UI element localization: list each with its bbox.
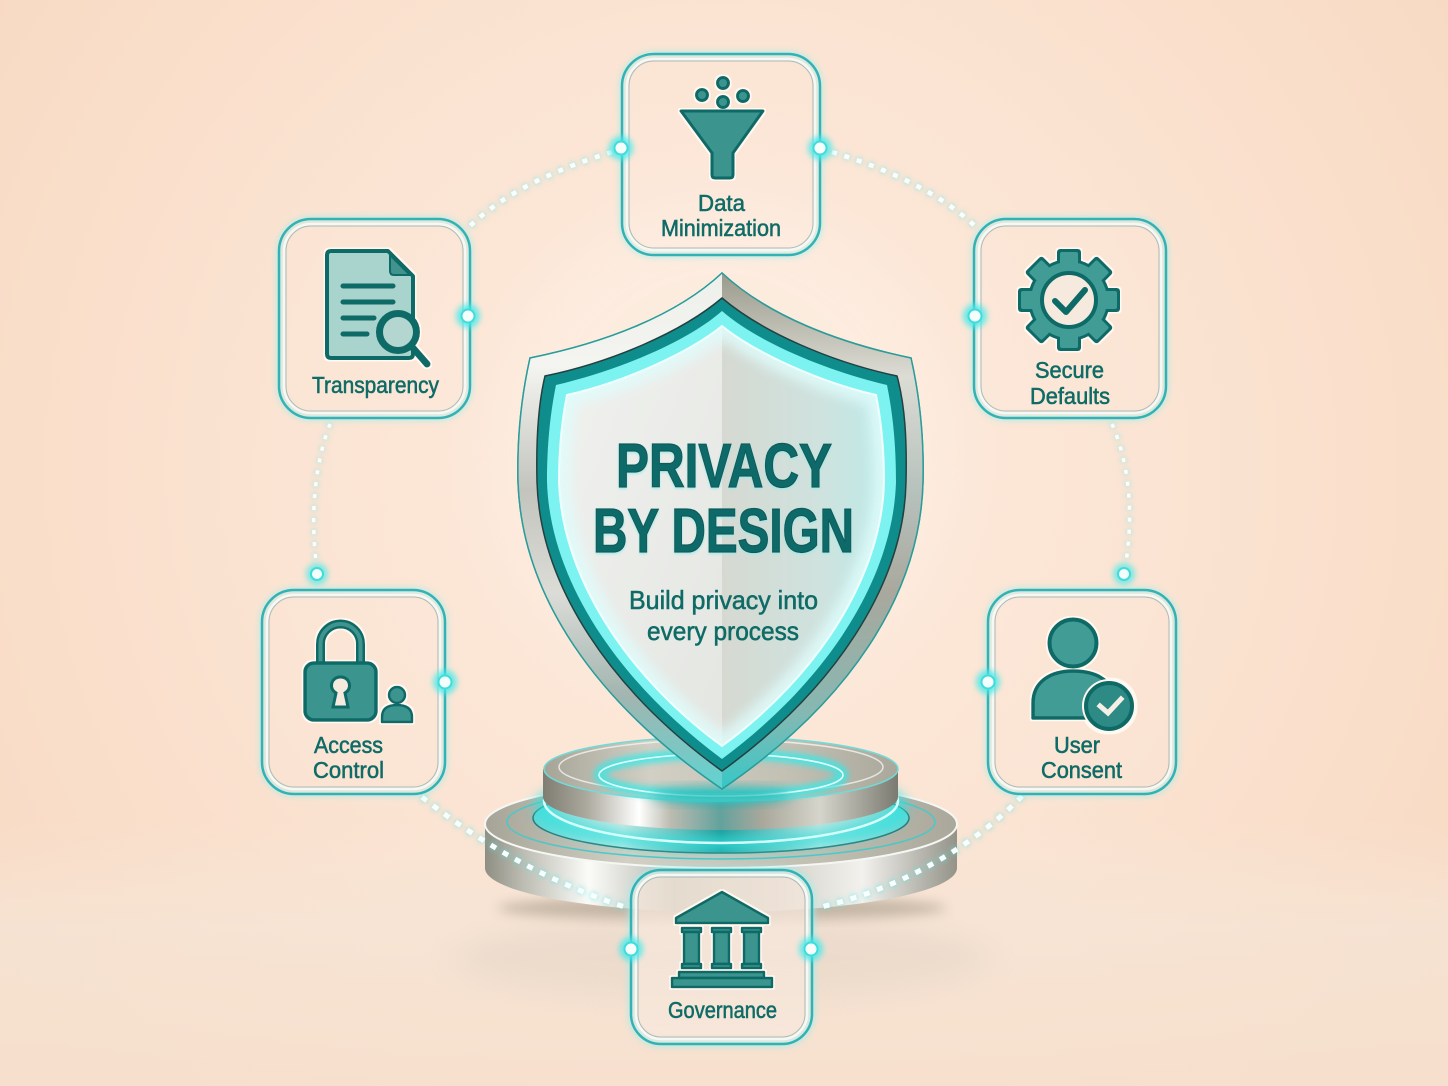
label: Data: [698, 190, 745, 216]
title: privacy by design: [593, 432, 854, 566]
pedestal: lower disc: [485, 780, 957, 912]
label: Secure: [1035, 357, 1104, 383]
shield: [518, 273, 923, 789]
card: governance: [619, 870, 823, 1044]
label: Minimization: [661, 215, 781, 241]
pedestal: neon ring: [541, 759, 901, 844]
icon: user with check badge: [1033, 620, 1136, 733]
connector nodes: [609, 136, 832, 160]
connector nodes: [306, 563, 457, 694]
card: transparency: [279, 219, 480, 418]
icon: gear with check: [1018, 249, 1120, 351]
icon: institution building: [672, 892, 772, 987]
shield: teal band and glow: [537, 298, 906, 771]
connector node: [963, 304, 987, 328]
label: User: [1054, 732, 1100, 758]
shield: inner panel: [559, 326, 884, 746]
connector nodes: [619, 937, 823, 961]
title: privacy by design: BY DESIGN: [593, 497, 854, 566]
icon: funnel with data dots: [681, 78, 763, 178]
card: user consent: [976, 563, 1176, 794]
icon: document with magnifier: [327, 251, 427, 364]
connector nodes: [976, 563, 1135, 694]
connector node: [456, 304, 480, 328]
label: [313, 732, 384, 783]
card: access control: [262, 563, 457, 794]
subtitle: [629, 585, 818, 646]
pedestal: upper disc: [543, 737, 898, 830]
subtitle: every process: [647, 616, 799, 646]
title: privacy by design: PRIVACY: [616, 432, 832, 501]
label: Control: [313, 757, 384, 783]
label: Defaults: [1030, 383, 1110, 409]
pedestal: [485, 737, 957, 912]
label: [1041, 732, 1123, 783]
dotted connector ring: [314, 152, 1130, 908]
icon: padlock and person: [305, 624, 412, 722]
subtitle: Build privacy into: [629, 585, 818, 615]
label: Access: [314, 732, 383, 758]
shield: steel frame: [518, 273, 923, 789]
card: data minimization: [609, 54, 832, 255]
label: [661, 190, 781, 241]
label: [1030, 357, 1110, 409]
label: Consent: [1041, 757, 1123, 783]
card: secure defaults: [963, 219, 1166, 418]
label: Governance: [668, 997, 777, 1023]
infographic: privacy by design: [206, 32, 1237, 1050]
label: Transparency: [312, 372, 439, 398]
